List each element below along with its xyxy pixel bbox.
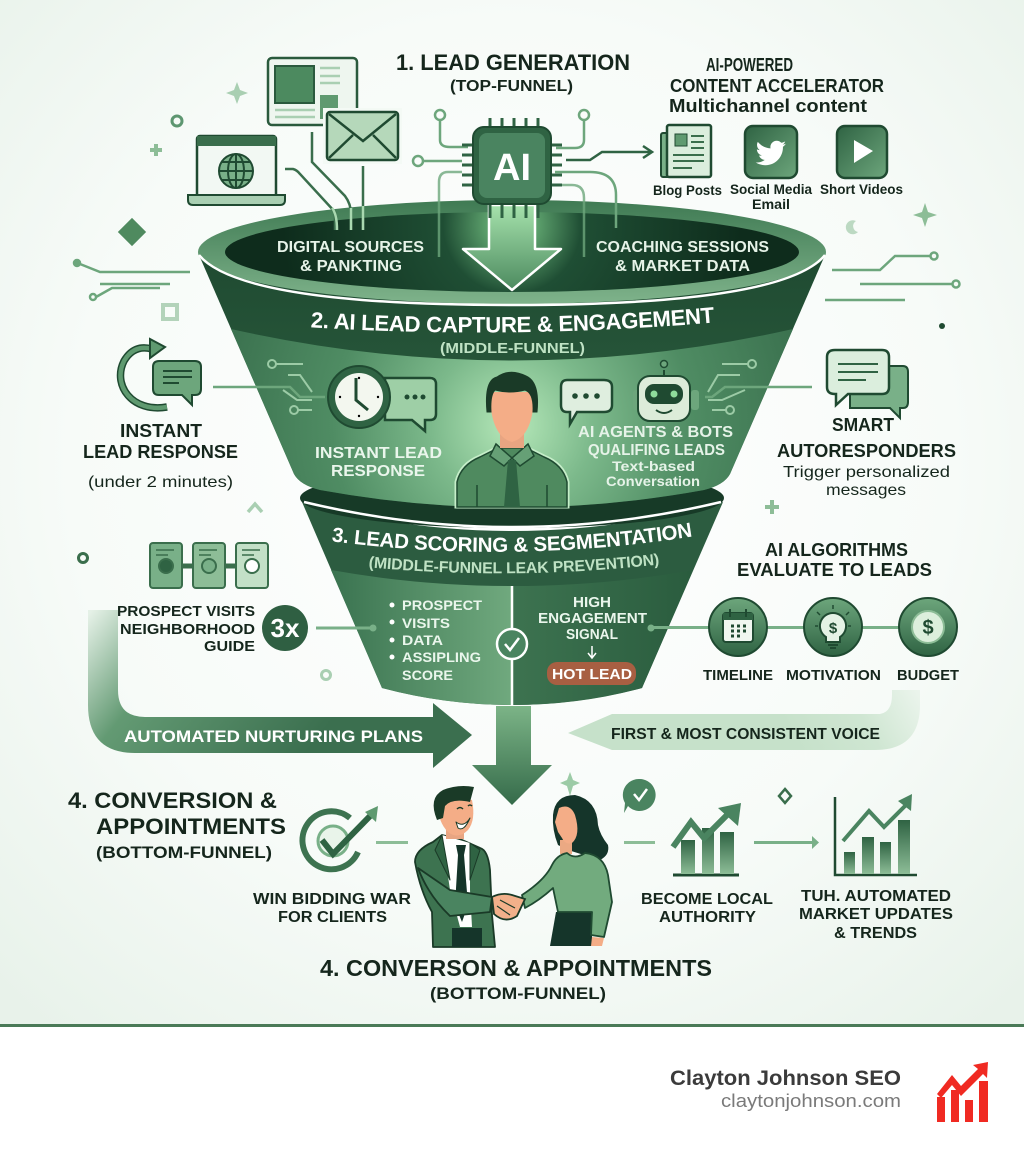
score list text: ASSIPLING <box>402 649 481 665</box>
callout: instant lead response: INSTANT <box>120 421 202 441</box>
heading: conversion centre: 4. CONVERSON & APPOINTMENTS <box>320 955 712 981</box>
big downward arrow <box>463 205 561 290</box>
callout: smart autoresponders: Trigger personalized <box>783 464 950 481</box>
text: instant lead response <box>315 445 442 480</box>
icon: laptop with globe <box>188 136 285 205</box>
arrow: chip to content channels <box>566 146 652 160</box>
text: AI agents and bots: AI AGENTS & BOTS <box>578 424 733 441</box>
text: automated market updates: TUH. AUTOMATED <box>801 888 951 905</box>
text: automated market updates: & TRENDS <box>834 925 917 942</box>
text: AI agents and bots: Text-based <box>612 458 695 474</box>
heading: AI content accelerator <box>669 55 884 116</box>
person at centre <box>456 372 568 507</box>
labels: evaluation criteria <box>703 667 959 684</box>
text: AI agents and bots: Conversation <box>606 473 700 489</box>
icon: budget coin: $ <box>922 617 934 639</box>
icon: AI chip <box>462 118 562 218</box>
score list text: DATA <box>402 632 443 648</box>
text: prospect visits: GUIDE <box>204 638 255 655</box>
hot lead text <box>538 595 647 658</box>
score list text <box>390 597 482 683</box>
panel: AI lead capture body <box>231 329 793 508</box>
heading: section 3: (MIDDLE-FUNNEL LEAK PREVENTION) <box>369 553 658 574</box>
text: prospect visits: PROSPECT VISITS <box>117 603 255 620</box>
decorative sparkles and rings <box>78 82 945 803</box>
icon: envelope <box>323 108 402 164</box>
heading: conversion centre <box>320 955 712 1003</box>
labels: evaluation criteria: BUDGET <box>897 667 959 684</box>
funnel well labels: & PANKTING <box>300 258 402 275</box>
title: lead generation: (TOP-FUNNEL) <box>450 78 573 95</box>
icon: clock and chat bubble <box>328 366 436 431</box>
icon: circular arrow with bubble <box>121 339 201 408</box>
heading: section 2 <box>311 307 714 357</box>
callout: smart autoresponders: SMART <box>832 415 894 435</box>
funnel well labels: DIGITAL SOURCES <box>277 239 424 256</box>
text: automated market updates <box>799 888 953 942</box>
icon: red growth logo <box>937 1062 988 1122</box>
text: instant lead response: INSTANT LEAD <box>315 445 442 462</box>
heading: section 2: (MIDDLE-FUNNEL) <box>440 341 585 357</box>
callout: instant lead response: LEAD RESPONSE <box>83 442 238 462</box>
content channel labels: Blog Posts <box>653 183 722 198</box>
connector lines from sources into funnel <box>285 132 363 230</box>
icon: social media bird <box>745 126 797 178</box>
funnel section 3 <box>302 502 723 706</box>
connector: funnel to evaluation icons <box>648 624 951 632</box>
icon: budget coin <box>899 598 957 656</box>
icon: chat check bubble <box>623 779 656 813</box>
heading: conversion centre: (BOTTOM-FUNNEL) <box>430 984 606 1003</box>
arrow: first and most consistent voice <box>568 690 920 750</box>
text: AI agents and bots <box>578 424 733 489</box>
heading: AI content accelerator: Multichannel content <box>669 96 867 116</box>
connector: right callout to funnel <box>705 387 812 397</box>
icon: three property cards <box>150 543 268 588</box>
text: AI agents and bots: QUALIFING LEADS <box>588 442 725 459</box>
score list text: VISITS <box>402 615 450 631</box>
heading: conversion left: 4. CONVERSION & <box>68 788 277 813</box>
heading: conversion left: (BOTTOM-FUNNEL) <box>96 843 272 862</box>
connector: 3x to funnel <box>316 624 376 632</box>
callout: smart autoresponders <box>777 415 956 499</box>
illustration: woman <box>522 795 612 946</box>
illustration: handshake <box>492 894 525 920</box>
icon: motivation lightbulb: $ <box>829 620 838 637</box>
icon: blog posts <box>661 125 711 177</box>
heading: conversion left <box>68 788 286 862</box>
callout: instant lead response <box>83 421 238 491</box>
heading: AI algorithms <box>737 540 932 580</box>
icon: smart autoresponder bubbles <box>827 350 908 418</box>
circuit lines right <box>825 252 960 300</box>
content channel labels <box>653 182 903 212</box>
circuit lines left <box>74 260 190 300</box>
heading: conversion left: APPOINTMENTS <box>96 814 286 839</box>
panel: score list <box>331 570 512 705</box>
heading: AI algorithms: AI ALGORITHMS <box>765 540 908 560</box>
connector lines from AI chip into funnel <box>413 110 616 257</box>
text: become local authority: AUTHORITY <box>659 909 756 926</box>
hot lead text: ENGAGEMENT <box>538 611 647 627</box>
funnel collar <box>300 468 724 528</box>
text: win bidding war: WIN BIDDING WAR <box>253 891 411 908</box>
funnel well labels: COACHING SESSIONS <box>596 239 769 256</box>
callout: smart autoresponders: messages <box>826 482 906 499</box>
icon: check circle <box>497 629 527 659</box>
title: lead generation <box>396 50 630 95</box>
footer brand text: Clayton Johnson SEO <box>670 1067 901 1090</box>
hot lead text: HIGH <box>573 595 611 611</box>
text: prospect visits <box>117 603 255 655</box>
callout: smart autoresponders: AUTORESPONDERS <box>777 441 956 461</box>
heading: AI content accelerator: AI-POWERED <box>706 55 793 75</box>
funnel rim ellipse <box>198 200 826 305</box>
arrow: down to conversion <box>472 706 552 805</box>
badge: 3x <box>262 605 308 651</box>
labels: evaluation criteria: TIMELINE <box>703 667 773 684</box>
connector: left callout to funnel <box>213 387 325 397</box>
icon: local authority chart <box>673 803 741 875</box>
icon: target check <box>302 806 378 869</box>
badge: hot lead <box>547 662 636 685</box>
arrow: automated nurturing plans: AUTOMATED NURTURING PLANS <box>124 727 423 746</box>
funnel well labels <box>277 239 769 275</box>
text: instant lead response: RESPONSE <box>331 463 425 480</box>
icon: robot <box>633 360 699 421</box>
title: lead generation: 1. LEAD GENERATION <box>396 50 630 75</box>
icon: market trends chart <box>835 794 917 875</box>
icon: AI chip: AI <box>493 147 531 189</box>
heading: AI algorithms: EVALUATE TO LEADS <box>737 560 932 580</box>
funnel well labels: & MARKET DATA <box>615 258 750 275</box>
arrow: authority to updates <box>754 836 819 849</box>
icon: short videos play <box>837 126 887 178</box>
connector dash <box>624 841 655 844</box>
footer brand text <box>670 1067 901 1111</box>
text: win bidding war: FOR CLIENTS <box>278 909 387 926</box>
circuit lines inside section 2 <box>268 360 756 414</box>
icon: timeline calendar <box>709 598 767 656</box>
heading: section 3: 3. LEAD SCORING & SEGMENTATION <box>332 522 692 552</box>
connector dash <box>376 841 408 844</box>
badge: hot lead: HOT LEAD <box>552 667 632 683</box>
content channel labels: Short Videos <box>820 182 903 197</box>
text: win bidding war <box>253 891 411 926</box>
badge: 3x: 3x <box>271 613 300 643</box>
arrow: first and most consistent voice: FIRST & MOST CONSISTENT VOICE <box>611 726 880 743</box>
text: become local authority: BECOME LOCAL <box>641 891 773 908</box>
text: automated market updates: MARKET UPDATES <box>799 906 953 923</box>
heading: AI content accelerator: CONTENT ACCELERATOR <box>670 76 884 96</box>
hot lead text: SIGNAL <box>566 627 618 643</box>
footer divider <box>0 1024 1024 1027</box>
icon: browser window <box>268 58 357 125</box>
icon: motivation lightbulb <box>804 598 862 656</box>
heading: section 2: 2. AI LEAD CAPTURE & ENGAGEMENT <box>311 307 714 333</box>
footer brand text: claytonjohnson.com <box>721 1091 901 1111</box>
score list text: SCORE <box>402 667 453 683</box>
callout: instant lead response: (under 2 minutes) <box>88 474 233 491</box>
heading: section 3 <box>332 522 692 574</box>
arrow: automated nurturing plans <box>88 610 472 768</box>
illustration: man <box>415 786 495 947</box>
text: become local authority <box>641 891 773 926</box>
funnel section 1: rim and body <box>199 255 825 508</box>
panel: hot lead <box>512 570 693 705</box>
content channel labels: Email <box>752 197 790 212</box>
labels: evaluation criteria: MOTIVATION <box>786 667 881 684</box>
text: prospect visits: NEIGHBORHOOD <box>120 621 255 638</box>
content channel labels: Social Media <box>730 182 812 197</box>
icon: chat bubble <box>561 380 612 424</box>
score list text: PROSPECT <box>402 597 482 613</box>
